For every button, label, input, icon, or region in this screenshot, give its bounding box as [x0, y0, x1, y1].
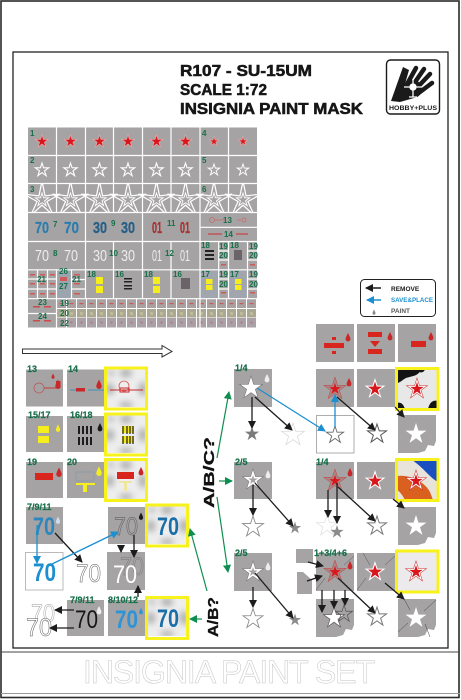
sheet separators — [28, 127, 257, 328]
saved blue 70 on white: 70 — [33, 559, 56, 587]
panel: left number rows — [26, 502, 188, 642]
step 7/9/11 mask: 70 — [33, 513, 55, 541]
row 6: decal cells — [30, 264, 255, 299]
red star step with cracks: 1+3/4+6 — [314, 548, 347, 558]
legend: REMOVE — [391, 286, 420, 293]
sheet labels: 23 — [38, 298, 47, 307]
row 5 numbers: white — [35, 248, 190, 265]
sheet labels: 6 — [202, 185, 207, 194]
sheet labels: 2 — [30, 156, 35, 165]
sheet labels: 20 — [60, 309, 69, 318]
sheet labels: 26 — [59, 267, 68, 276]
step white star — [234, 363, 272, 407]
row 7: small cells — [33, 299, 257, 328]
gray with white 70: 70 — [113, 561, 137, 589]
peeled outline 70s: 70 — [26, 614, 52, 642]
sheet labels: 20 — [219, 251, 228, 260]
red decal 1 — [316, 324, 354, 362]
result blue 70: 70 — [157, 513, 179, 541]
step result 13/14 — [106, 368, 147, 409]
faint star — [282, 423, 304, 445]
sheet labels: 10 — [109, 249, 118, 258]
step blue 70: 8/10/12 — [108, 595, 138, 605]
outlined star — [243, 608, 263, 627]
red star step with cracks — [314, 548, 354, 591]
sheet labels: 18 — [144, 270, 153, 279]
faint and gray stars — [317, 515, 344, 538]
sheet labels: 13 — [223, 216, 232, 225]
step blue 70: 70 — [115, 606, 138, 634]
red decal 2 — [357, 324, 395, 362]
outlined star — [367, 607, 387, 625]
sheet labels: 22 — [60, 319, 69, 328]
result blue 70 — [146, 505, 188, 546]
red star step 1/4 — [316, 457, 354, 499]
sheet labels: 18 — [201, 241, 210, 250]
sheet labels: 24 — [38, 312, 47, 321]
arrows: options — [190, 392, 232, 619]
outlined star — [243, 516, 263, 536]
sheet labels: 11 — [167, 219, 176, 228]
legend — [360, 280, 436, 316]
sheet labels: 20 — [249, 280, 258, 289]
outline 70: 70 — [76, 560, 101, 588]
step blue 70 — [108, 595, 145, 636]
panel: mask sheet — [24, 127, 261, 328]
saved blue 70 on white — [26, 552, 63, 590]
logo: Hobby+Plus — [386, 60, 440, 114]
step white star: 1/4 — [235, 363, 248, 373]
row 5 numbers: white: 30 — [121, 248, 135, 265]
peeled outline 70s: 70 — [31, 600, 55, 628]
footer title: INSIGNIA PAINT SET — [83, 654, 375, 690]
row 5 numbers: white: 70 — [35, 248, 49, 265]
step black 70 — [67, 595, 104, 636]
step 15/17: 15/17 — [28, 410, 51, 420]
sheet labels: 19 — [219, 242, 228, 251]
step white star: 2/5 — [235, 457, 248, 467]
step 7/9/11 mask: 7/9/11 — [27, 502, 52, 512]
sheet labels: 7 — [53, 220, 58, 229]
sheet labels: 19 — [249, 270, 258, 279]
sheet labels: 16 — [173, 270, 182, 279]
step 7/9/11 mask — [26, 502, 63, 544]
row 4 numbers: coloured: 01 — [180, 220, 190, 237]
result blue 70 — [146, 598, 188, 638]
panel: right red decals — [316, 324, 436, 362]
row 5 numbers: white: 01 — [180, 248, 190, 265]
red star on cracked gray — [357, 553, 395, 591]
sheet labels: 20 — [219, 280, 228, 289]
mottled result — [396, 551, 438, 592]
sheet labels: 18 — [230, 241, 239, 250]
camouflage result — [396, 368, 438, 410]
step white star — [234, 457, 272, 499]
cracked gray star panel — [398, 599, 436, 637]
damaged gray star panel — [398, 415, 436, 453]
title — [180, 63, 363, 118]
step 16/18: 16/18 — [70, 410, 93, 420]
row 5 vent grilles — [205, 250, 242, 260]
sheet labels: 14 — [224, 230, 233, 239]
sheet labels: 21 — [72, 275, 81, 284]
label: A/B?: A/B? — [205, 597, 222, 637]
sheet labels: 20 — [249, 251, 258, 260]
title: SCALE 1:72 — [180, 82, 267, 99]
outlined star — [367, 424, 387, 442]
step black 70: 70 — [75, 606, 98, 634]
direction arrow — [22, 346, 172, 357]
arrows: save and place — [37, 388, 335, 565]
row 1: red stars — [34, 134, 249, 148]
gray with white 70: 70 — [120, 553, 144, 581]
result blue 70: 70 — [157, 605, 179, 633]
row 4 numbers: coloured: 30 — [121, 220, 135, 237]
panel: star sequence 2/5 — [234, 457, 438, 545]
step 19: 19 — [27, 457, 37, 467]
dark small star — [245, 426, 259, 440]
row 2: white outline stars — [35, 163, 249, 176]
sheet labels: 27 — [59, 282, 68, 291]
mask pieces — [296, 549, 313, 594]
row 5 numbers: white: 30 — [93, 248, 107, 265]
peeled outline 70s — [26, 600, 55, 642]
sheet labels: 5 — [202, 156, 207, 165]
sheet labels: 19 — [219, 270, 228, 279]
small dark star — [289, 614, 301, 625]
row 4 numbers: coloured: 70 — [64, 220, 79, 237]
step black 70: 7/9/11 — [70, 595, 95, 605]
sheet labels: 17 — [230, 270, 239, 279]
legend: PAINT — [391, 308, 410, 315]
step result 15-18 — [106, 414, 147, 455]
step gray outline 70: 70 — [114, 513, 138, 541]
sheet labels: 1 — [30, 129, 35, 138]
row 5 numbers: white: 70 — [64, 248, 78, 265]
peeled gray panel — [316, 599, 354, 637]
sheet labels: 21 — [37, 275, 46, 284]
arrows: remove — [50, 397, 404, 628]
red decal 3 — [398, 324, 436, 362]
red star step 1/4: 1/4 — [316, 457, 329, 467]
boxed star — [316, 416, 354, 453]
panel: star sequence 1/4 — [234, 363, 438, 453]
red star step — [316, 369, 354, 407]
footer divider — [1, 651, 460, 653]
sheet labels — [30, 129, 258, 328]
orange and blue result — [396, 460, 438, 500]
step 20: 20 — [67, 457, 77, 467]
sheet labels: 8 — [53, 249, 58, 258]
outlined star — [367, 516, 387, 534]
step 13: 13 — [27, 364, 37, 374]
sheet labels: 18 — [87, 270, 96, 279]
row 4 numbers: coloured: 30 — [93, 220, 107, 237]
title: INSIGNIA PAINT MASK — [180, 101, 363, 118]
sheet labels: 19 — [60, 299, 69, 308]
step 14: 14 — [68, 364, 78, 374]
gray with white 70 — [107, 552, 145, 590]
panel: left rows 13-20 — [26, 364, 147, 500]
step result 19/20 — [106, 460, 147, 500]
step white star: 2/5 — [235, 548, 248, 558]
row 4 numbers: coloured: 70 — [35, 220, 49, 237]
panel: star sequence 2/5 and 1+3/4+6 — [234, 548, 438, 637]
sheet gray rows — [28, 128, 257, 328]
red star on gray — [357, 462, 395, 499]
legend: SAVE&PLACE — [391, 297, 434, 304]
sheet labels: 3 — [30, 185, 35, 194]
sheet labels: 9 — [111, 219, 116, 228]
title: R107 - SU-15UM — [180, 63, 312, 80]
row 5 numbers: white: 01 — [152, 248, 162, 265]
logo: Hobby+Plus: HOBBY+PLUS — [389, 105, 438, 112]
row 4 numbers: coloured — [35, 220, 190, 237]
step gray outline 70 — [108, 507, 145, 544]
row 4 numbers: coloured: 01 — [152, 220, 162, 237]
footer rule — [1, 692, 460, 694]
row 4: decals 13 and 14 — [208, 218, 248, 234]
sheet labels: 16 — [115, 270, 124, 279]
sheet labels: 12 — [165, 249, 174, 258]
sheet labels: 17 — [201, 270, 210, 279]
small dark star — [289, 522, 301, 533]
red star on gray — [357, 369, 395, 407]
damaged gray star panel — [398, 507, 436, 545]
label: A/B/C?: A/B/C? — [201, 437, 218, 508]
sheet labels: 19 — [249, 242, 258, 251]
sheet labels: 4 — [202, 129, 207, 138]
row 3: large white outline stars — [28, 184, 257, 212]
step white star — [234, 548, 272, 591]
